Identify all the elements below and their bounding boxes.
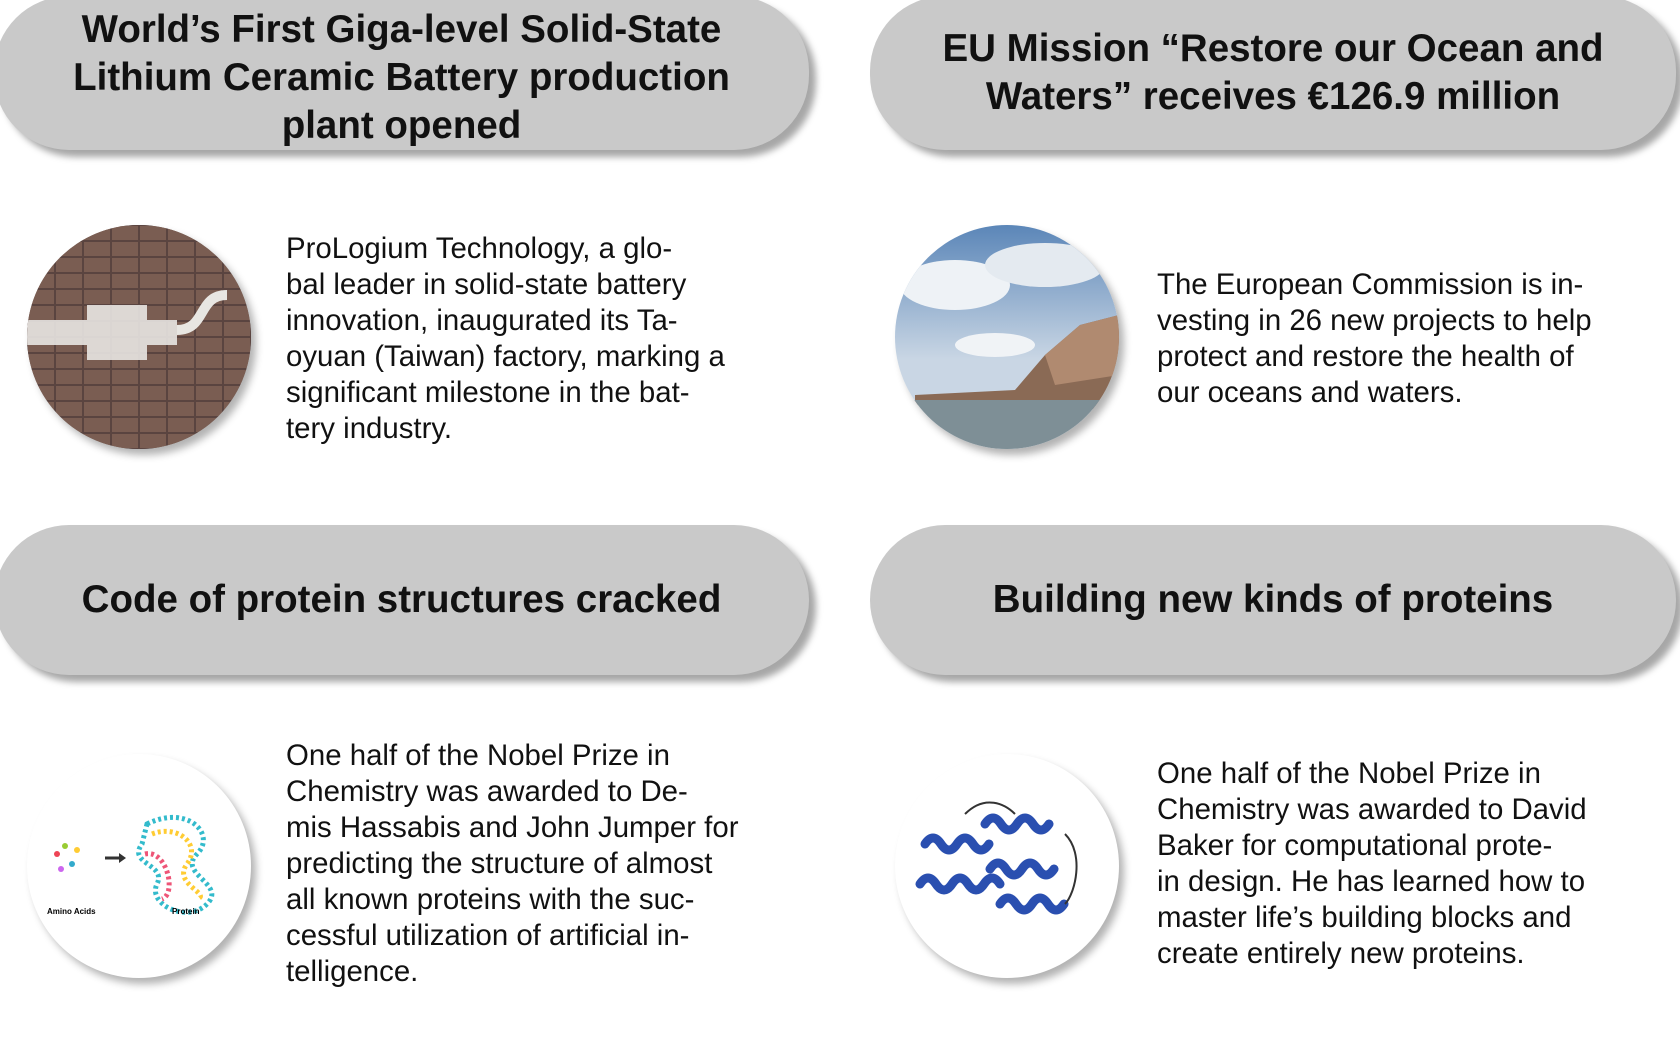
text block: protein structures: telligence.: [286, 955, 418, 988]
panel: protein structure title pill: Code of protein structures cracked: [82, 578, 721, 621]
text block: protein structures: predicting the structure of almost: [286, 847, 712, 880]
icon: amino acids to protein diagram: Amino Acids: [47, 907, 96, 916]
icon: brick pavement charging photo: [27, 225, 251, 449]
text block: battery: oyuan (Taiwan) factory, marking a: [286, 340, 725, 373]
icon: coastline photo: [895, 225, 1119, 449]
text block: ocean mission: our oceans and waters.: [1157, 376, 1463, 409]
text block: protein structures: Chemistry was awarded to De-: [286, 775, 688, 808]
text block: battery: innovation, inaugurated its Ta-: [286, 304, 678, 337]
text block: new proteins: One half of the Nobel Prize in: [1157, 757, 1541, 790]
panel: new proteins title pill: [870, 525, 1676, 675]
text block: new proteins: [1157, 757, 1587, 970]
text block: protein structures: mis Hassabis and John Jumper for: [286, 811, 738, 844]
text block: new proteins: in design. He has learned how to: [1157, 865, 1585, 898]
text block: protein structures: [286, 739, 738, 988]
panel: battery title pill: plant opened: [282, 104, 521, 147]
panel: protein structure title pill: [0, 525, 809, 675]
text block: ocean mission: [1157, 268, 1592, 409]
panel: new proteins title pill: Building new kinds of proteins: [993, 578, 1553, 621]
text block: protein structures: all known proteins with the suc-: [286, 883, 694, 916]
panel: ocean mission title pill: EU Mission “Restore our Ocean and: [942, 27, 1604, 70]
text block: battery: [286, 232, 725, 445]
panel: ocean mission title pill: [870, 0, 1676, 150]
text block: protein structures: One half of the Nobel Prize in: [286, 739, 670, 772]
panel: battery title pill: [0, 0, 809, 150]
icon: amino acids to protein diagram: [27, 754, 251, 978]
text block: new proteins: create entirely new proteins.: [1157, 937, 1525, 970]
text block: new proteins: Baker for computational prote-: [1157, 829, 1552, 862]
text block: new proteins: Chemistry was awarded to David: [1157, 793, 1587, 826]
text block: ocean mission: vesting in 26 new projects to help: [1157, 304, 1592, 337]
text block: battery: significant milestone in the bat-: [286, 376, 690, 409]
panel: ocean mission title pill: Waters” receives €126.9 million: [986, 75, 1560, 118]
text block: battery: tery industry.: [286, 412, 452, 445]
icon: amino acids to protein diagram: Protein: [172, 907, 200, 916]
text block: protein structures: cessful utilization of artificial in-: [286, 919, 689, 952]
text block: battery: ProLogium Technology, a glo-: [286, 232, 672, 265]
panel: battery title pill: Lithium Ceramic Battery production: [73, 56, 730, 99]
text block: battery: bal leader in solid-state battery: [286, 268, 686, 301]
icon: designed protein ribbon: [895, 754, 1119, 978]
text block: ocean mission: The European Commission is in-: [1157, 268, 1583, 301]
text block: new proteins: master life’s building blocks and: [1157, 901, 1571, 934]
text block: ocean mission: protect and restore the health of: [1157, 340, 1574, 373]
panel: battery title pill: World’s First Giga-level Solid-State: [82, 8, 721, 51]
